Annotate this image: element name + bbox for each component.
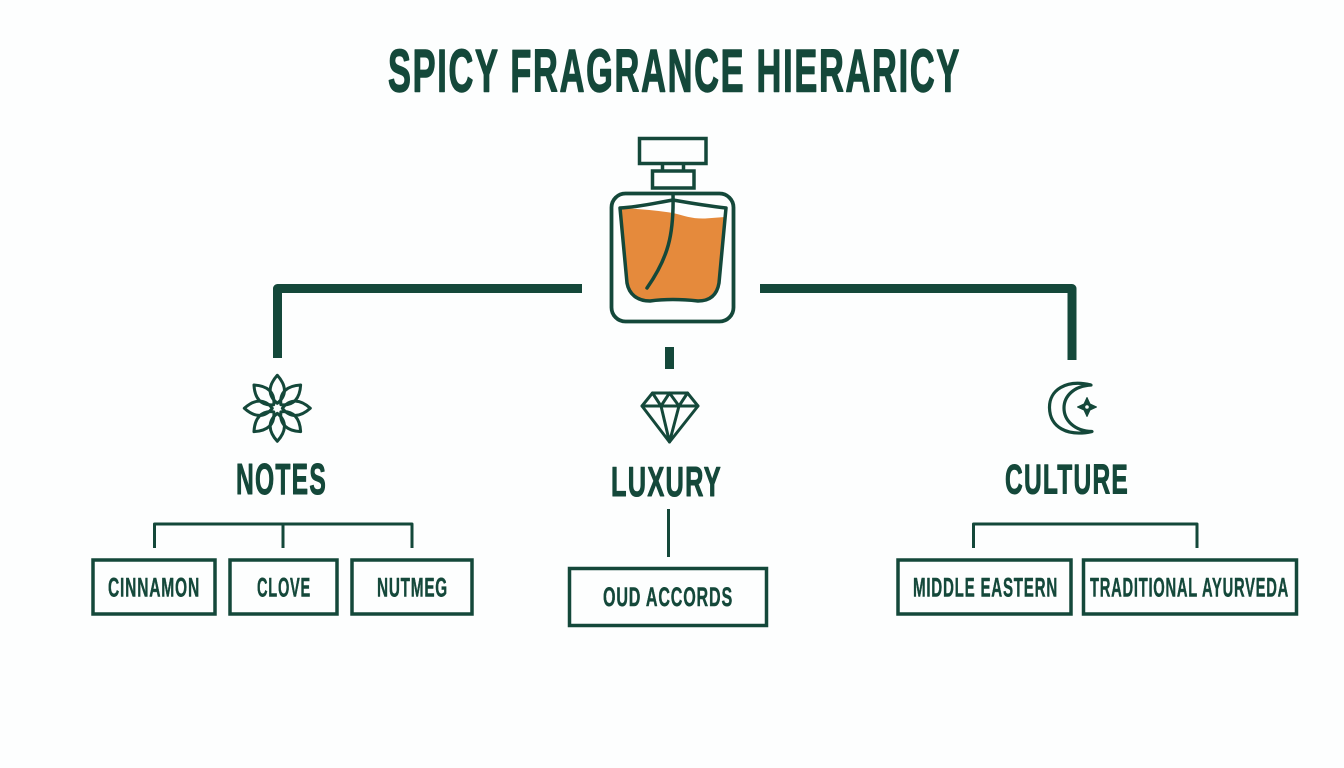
box: middle eastern: MIDDLE EASTERN <box>913 572 1058 602</box>
box: oud accords <box>570 568 766 626</box>
panel: notes <box>93 375 472 614</box>
connector: bottle to culture <box>760 288 1072 360</box>
heading: culture: CULTURE <box>1005 456 1129 502</box>
box: oud accords: OUD ACCORDS <box>603 582 733 612</box>
icon: star anise flower <box>244 375 310 441</box>
box: cinnamon <box>93 560 215 614</box>
icon: diamond <box>642 393 698 442</box>
heading: notes: NOTES <box>236 455 327 504</box>
connector: luxury to oud accords <box>667 509 670 557</box>
bracket: culture branches <box>974 524 1197 548</box>
icon: perfume bottle <box>612 138 734 322</box>
panel: culture <box>898 383 1296 614</box>
connector: bottle to luxury <box>665 347 674 369</box>
box: middle eastern <box>898 560 1071 614</box>
box: nutmeg: NUTMEG <box>377 572 448 602</box>
box: traditional ayurveda <box>1084 560 1296 614</box>
panel: luxury <box>570 393 766 626</box>
icon: crescent moon and star <box>1049 383 1096 433</box>
heading: luxury: LUXURY <box>611 458 722 505</box>
box: cinnamon: CINNAMON <box>108 572 200 602</box>
box: nutmeg <box>352 560 472 614</box>
box: clove: CLOVE <box>257 572 311 602</box>
bracket: notes branches <box>154 524 412 548</box>
box: clove <box>230 560 337 614</box>
connector: bottle to notes <box>278 288 582 358</box>
